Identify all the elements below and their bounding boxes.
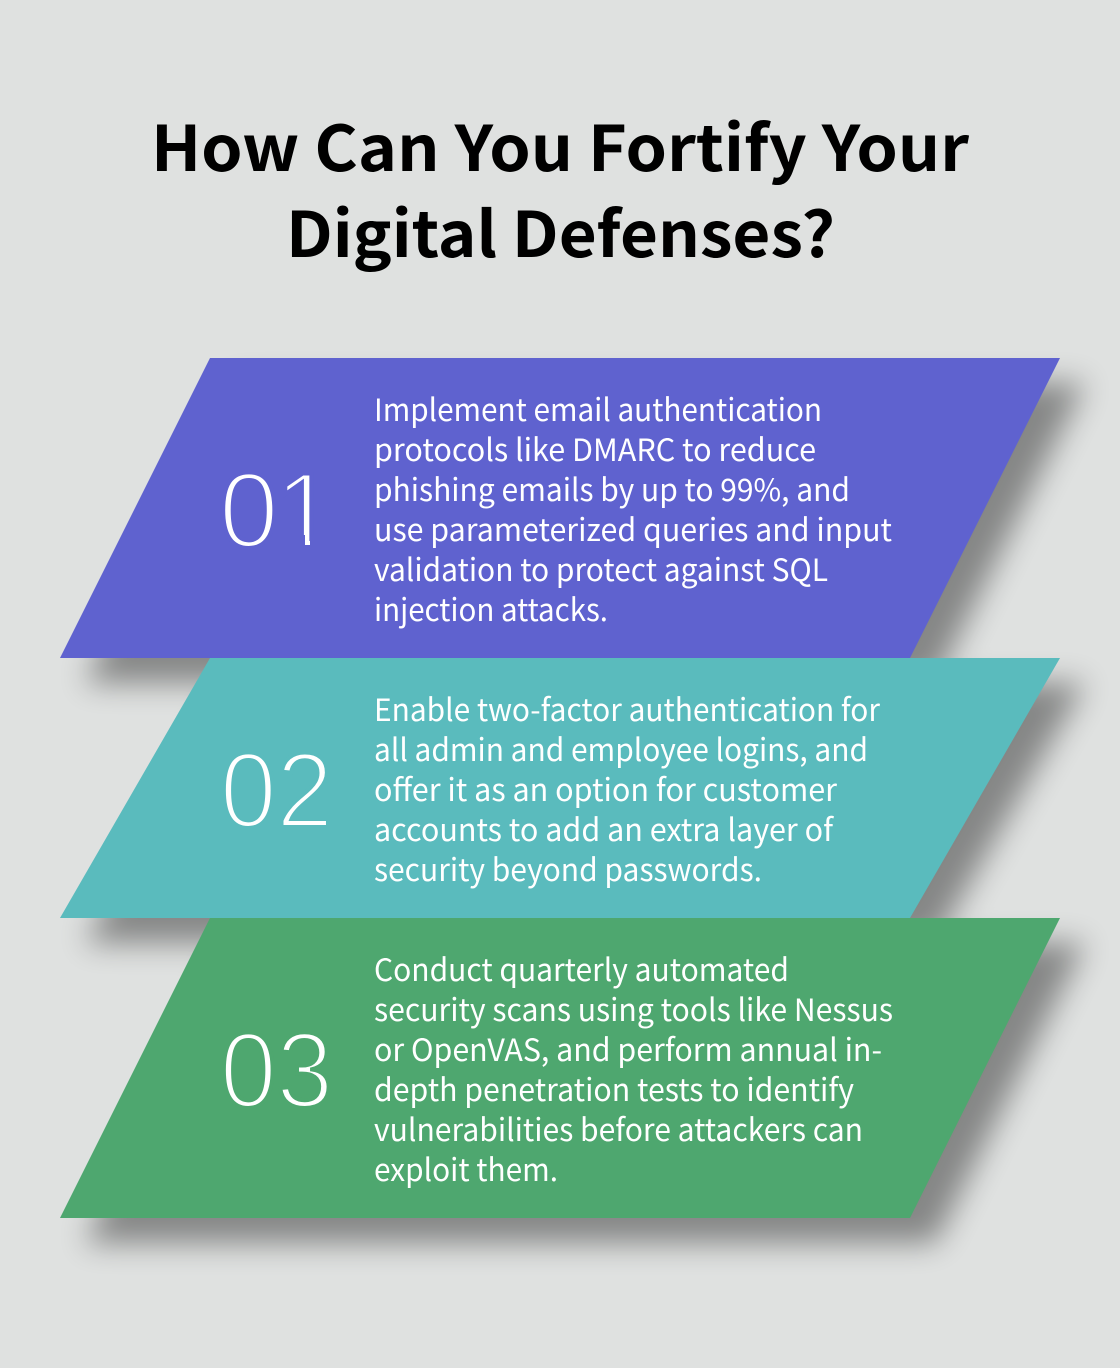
step 03 text: security scans using tools like Nessus	[374, 985, 893, 1030]
panel shadows	[85, 383, 1085, 1243]
title	[151, 99, 970, 276]
step number 02: 02	[220, 730, 333, 850]
step 01 text	[374, 385, 892, 630]
step 03 text: or OpenVAS, and perform annual in-	[374, 1025, 882, 1070]
step 01 text: Implement email authentication	[374, 385, 822, 430]
step 03 text: exploit them.	[374, 1145, 558, 1190]
step 01 text: injection attacks.	[374, 585, 608, 630]
step 01 text: protocols like DMARC to reduce	[374, 425, 816, 470]
step 02 text: all admin and employee logins, and	[374, 725, 868, 770]
step 02 text: offer it as an option for customer	[374, 765, 838, 810]
step 01 text: phishing emails by up to 99%, and	[374, 465, 850, 510]
step number 01: 0	[219, 450, 279, 570]
step 03 text: Conduct quarterly automated	[374, 945, 789, 990]
step number 01: 1	[275, 450, 335, 570]
step 01 text: use parameterized queries and input	[374, 505, 892, 550]
panel: step 02	[60, 658, 1060, 918]
step 02 text: accounts to add an extra layer of	[374, 805, 835, 850]
title: How Can You Fortify Your	[151, 99, 970, 190]
step 01 text: validation to protect against SQL	[374, 545, 828, 590]
step 02 text	[374, 685, 881, 890]
step 03 text	[374, 945, 893, 1190]
step 03 text: depth penetration tests to identify	[374, 1065, 854, 1110]
panel: step 03	[60, 918, 1060, 1218]
title: Digital Defenses?	[286, 185, 835, 276]
step 03 text: vulnerabilities before attackers can	[374, 1105, 863, 1150]
step number 01	[219, 450, 335, 570]
step number 03: 03	[220, 1010, 333, 1130]
panel: step 01	[60, 358, 1060, 658]
step 02 text: Enable two-factor authentication for	[374, 685, 881, 730]
step 02 text: security beyond passwords.	[374, 845, 762, 890]
